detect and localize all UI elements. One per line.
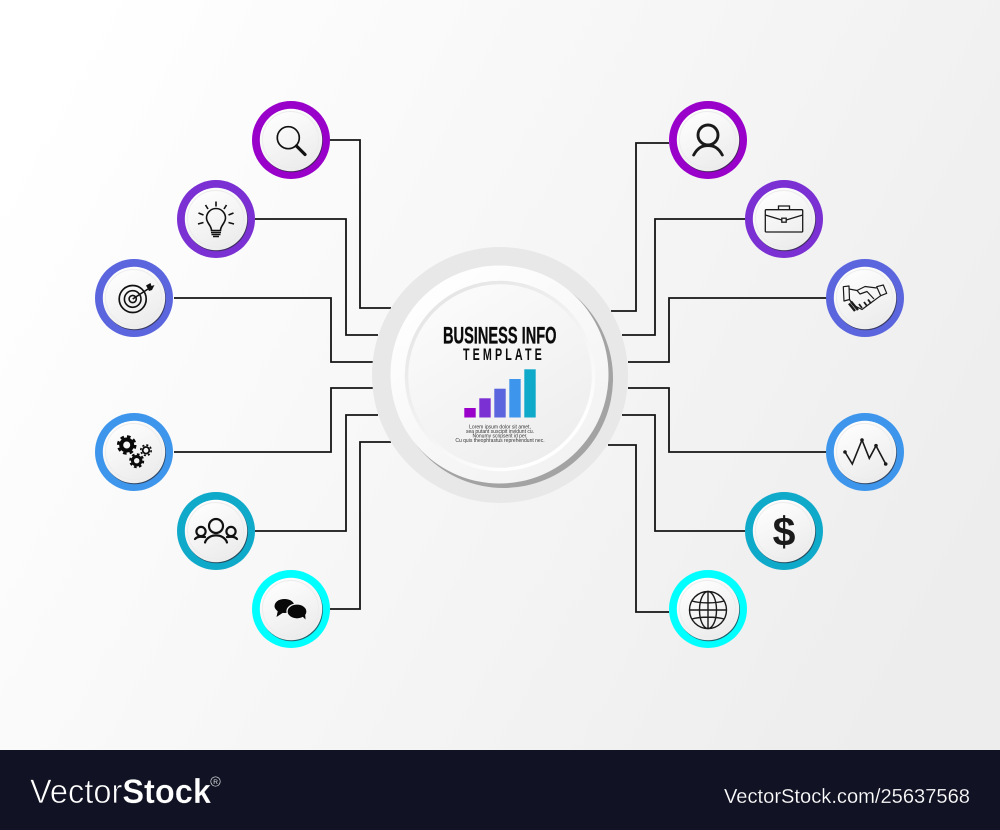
description text: Nonumy scripserit id per. — [472, 434, 528, 440]
node: chat — [252, 570, 330, 648]
node: settings — [95, 413, 173, 491]
icon: briefcase — [765, 206, 803, 232]
icon: gears — [118, 436, 151, 467]
icon: group of people — [195, 519, 237, 542]
node: business — [745, 180, 823, 258]
node: analytics — [826, 413, 904, 491]
icon: handshake — [843, 285, 887, 311]
node: global — [669, 570, 747, 648]
icon: light bulb — [198, 202, 234, 236]
description text: sea putant suscipit invidunt cu. — [466, 429, 534, 435]
icon: globe — [690, 592, 726, 628]
icon: person — [694, 125, 722, 155]
icon: magnifier — [277, 127, 305, 154]
registered mark — [211, 777, 220, 786]
description text — [455, 424, 545, 444]
node: target — [95, 259, 173, 337]
bar chart — [464, 369, 536, 418]
description text: Cu quis theophrastus reprehendunt nec. — [455, 438, 545, 444]
title: BUSINESS INFO — [443, 322, 556, 350]
node: search — [252, 101, 330, 179]
title: TEMPLATE — [463, 345, 545, 364]
node: profile — [669, 101, 747, 179]
description text: Lorem ipsum dolor sit amet, — [469, 424, 531, 430]
icon: line graph — [843, 438, 888, 466]
icon: dollar sign: $ — [773, 508, 796, 554]
icon: speech bubbles — [274, 599, 307, 620]
footer image id: VectorStock.com/25637568 — [724, 786, 970, 808]
node: team — [177, 492, 255, 570]
brand logo: VectorStock — [30, 773, 212, 811]
registered mark: R — [213, 779, 218, 786]
node: partnership — [826, 259, 904, 337]
connector lines — [174, 140, 827, 612]
footer bar — [0, 750, 1000, 830]
node: idea — [177, 180, 255, 258]
title — [443, 322, 556, 364]
central hub — [372, 247, 628, 503]
node: finance — [745, 492, 823, 570]
icon: target with arrow — [119, 283, 154, 312]
